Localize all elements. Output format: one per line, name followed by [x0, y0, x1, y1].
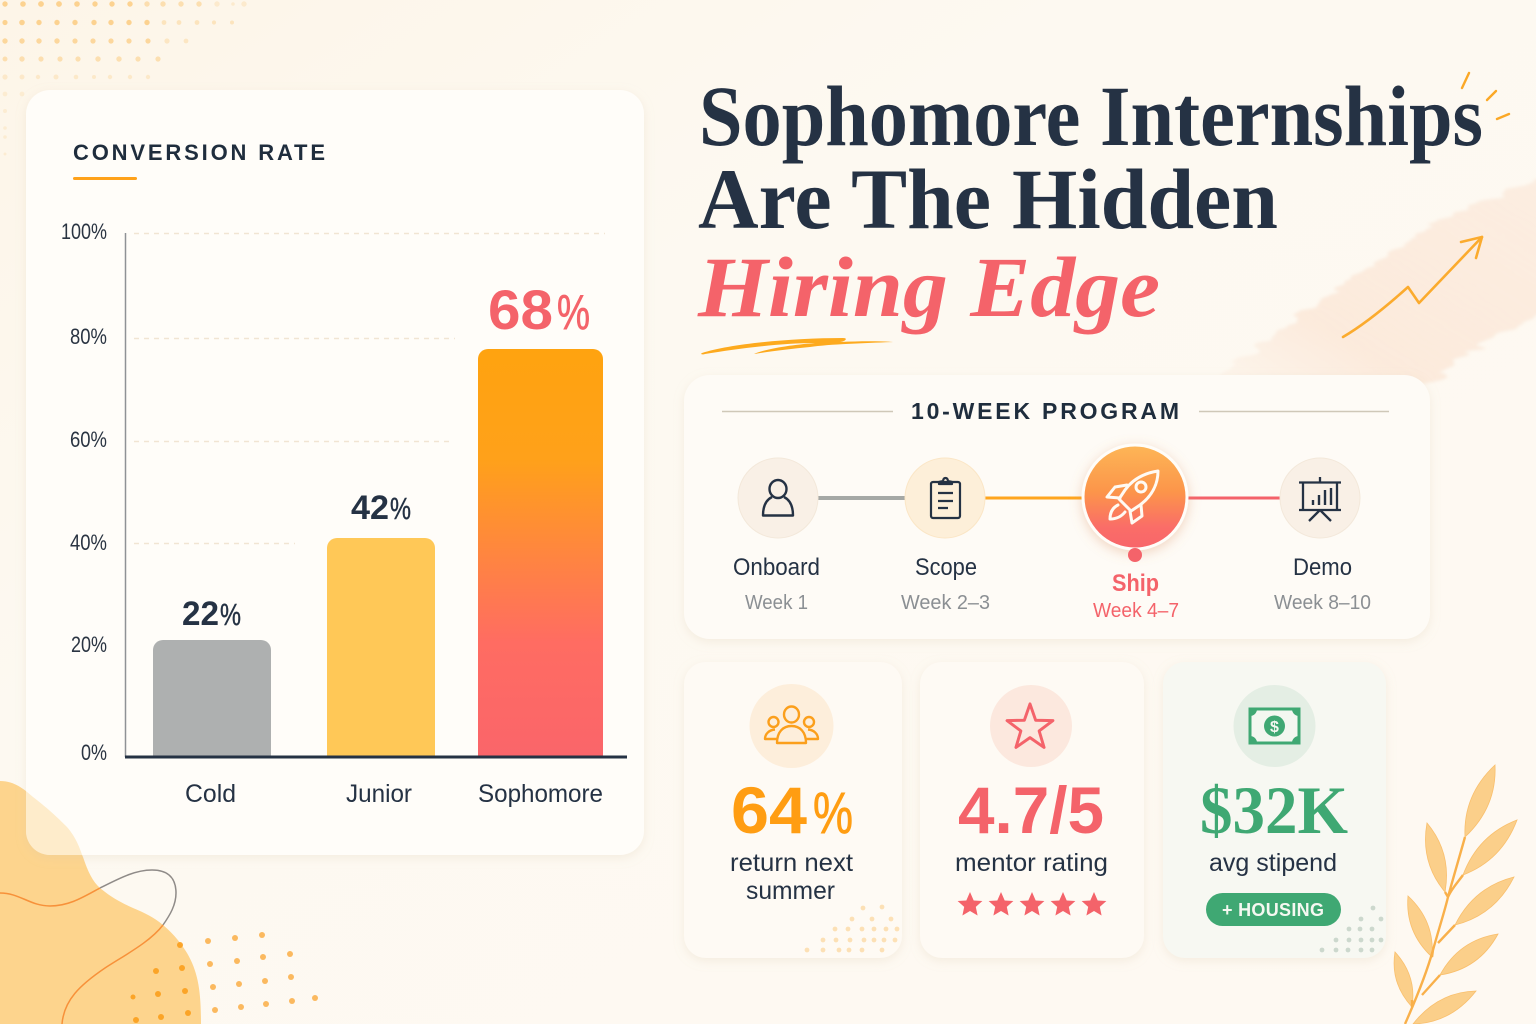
five stars: [958, 892, 1106, 916]
panel: 10-week program: [684, 375, 1430, 639]
leaf sprig: bottom right: [1394, 765, 1517, 1024]
pill: housing: + HOUSING: [1222, 900, 1324, 920]
value: 68%: [488, 278, 590, 341]
category labels: Junior: [346, 780, 412, 808]
value: 64%: %: [813, 781, 853, 846]
bar: sophomore 68%: [478, 349, 603, 757]
y-axis labels: 20%: [71, 632, 107, 657]
step: scope: Week 2–3: [901, 592, 990, 614]
y-axis labels: 60%: [70, 427, 107, 452]
connector: onboard to scope: [816, 496, 908, 500]
title: Sophomore Internships: [699, 68, 1483, 164]
title: Hiring Edge: [697, 239, 1160, 335]
label: avg stipend: avg stipend: [1209, 849, 1337, 877]
category labels: Cold: [185, 780, 236, 808]
program heading: 10-WEEK PROGRAM: [911, 398, 1179, 424]
grid lines and y axis: [126, 233, 605, 757]
value: 64%: [731, 773, 853, 847]
connector: ship to demo: [1188, 496, 1282, 500]
y-axis labels: 0%: [81, 740, 107, 765]
connector: scope to ship: [984, 496, 1084, 500]
value: 68%: 68: [488, 278, 553, 341]
stat card: avg stipend: [1163, 662, 1386, 958]
label: return next summer: summer: [746, 877, 835, 905]
step: scope: [901, 458, 990, 614]
stat card: return next summer: [684, 662, 902, 958]
title underline swoosh: [701, 338, 893, 354]
blob outline curve: [0, 870, 176, 1024]
label: return next summer: [730, 849, 853, 905]
value: 22%: [182, 595, 241, 633]
category labels: [185, 780, 603, 808]
value: 22%: %: [220, 597, 241, 632]
step: demo: Week 8–10: [1274, 592, 1371, 614]
panel: conversion rate chart: [0, 90, 644, 870]
value: 68%: %: [557, 286, 590, 340]
value: 42%: %: [390, 491, 411, 526]
step: scope: Scope: [915, 554, 977, 581]
value: 22%: 22: [182, 595, 219, 633]
icon: group of people: [750, 684, 834, 768]
title: Are The Hidden: [698, 151, 1278, 247]
chart baseline: [125, 756, 627, 758]
step: onboard: Onboard: [733, 554, 820, 581]
y-axis labels: 100%: [61, 219, 107, 244]
blob: bottom left: [0, 781, 201, 1024]
stat card: mentor rating: [920, 662, 1144, 958]
bar: cold 22%: [153, 640, 271, 757]
step: ship (active): Ship: [1112, 570, 1159, 597]
step: onboard: [733, 458, 820, 614]
y-axis labels: [61, 219, 107, 765]
brush stroke: top right: [1218, 180, 1536, 385]
value: 42%: 42: [351, 489, 389, 527]
value: $32K: $32K: [1200, 772, 1348, 848]
card corner dots: [805, 905, 899, 952]
step: demo: [1274, 458, 1371, 614]
card corner dots: [1320, 906, 1383, 952]
value: 42%: [351, 489, 411, 527]
label: return next summer: return next: [730, 849, 853, 877]
y-axis labels: 40%: [70, 530, 107, 555]
dots: bottom left: [130, 932, 318, 1023]
heading underline: [73, 177, 137, 180]
heading rules: [722, 410, 1389, 412]
chart heading: CONVERSION RATE: [73, 140, 325, 165]
label: mentor rating: mentor rating: [955, 849, 1108, 877]
category labels: Sophomore: [478, 780, 603, 808]
step: onboard: Week 1: [745, 592, 808, 614]
step: ship (active): [1082, 444, 1188, 622]
icon: banknote: $: [1270, 719, 1279, 736]
decorative dot grid: top left: [2, 1, 247, 155]
value: 4.7/5: 4.7/5: [958, 773, 1104, 847]
value: 64%: 64: [731, 773, 807, 847]
bar: junior 42%: [327, 538, 435, 757]
pill: housing: [1206, 893, 1341, 926]
icon: banknote: [1234, 685, 1316, 767]
title: [697, 68, 1483, 335]
icon: star outline: [990, 685, 1072, 767]
step: demo: Demo: [1293, 554, 1352, 581]
step: ship (active): Week 4–7: [1093, 600, 1179, 622]
arrow: upward growth: [1343, 237, 1482, 337]
y-axis labels: 80%: [70, 324, 107, 349]
sparkle rays beside title: [1462, 73, 1509, 119]
